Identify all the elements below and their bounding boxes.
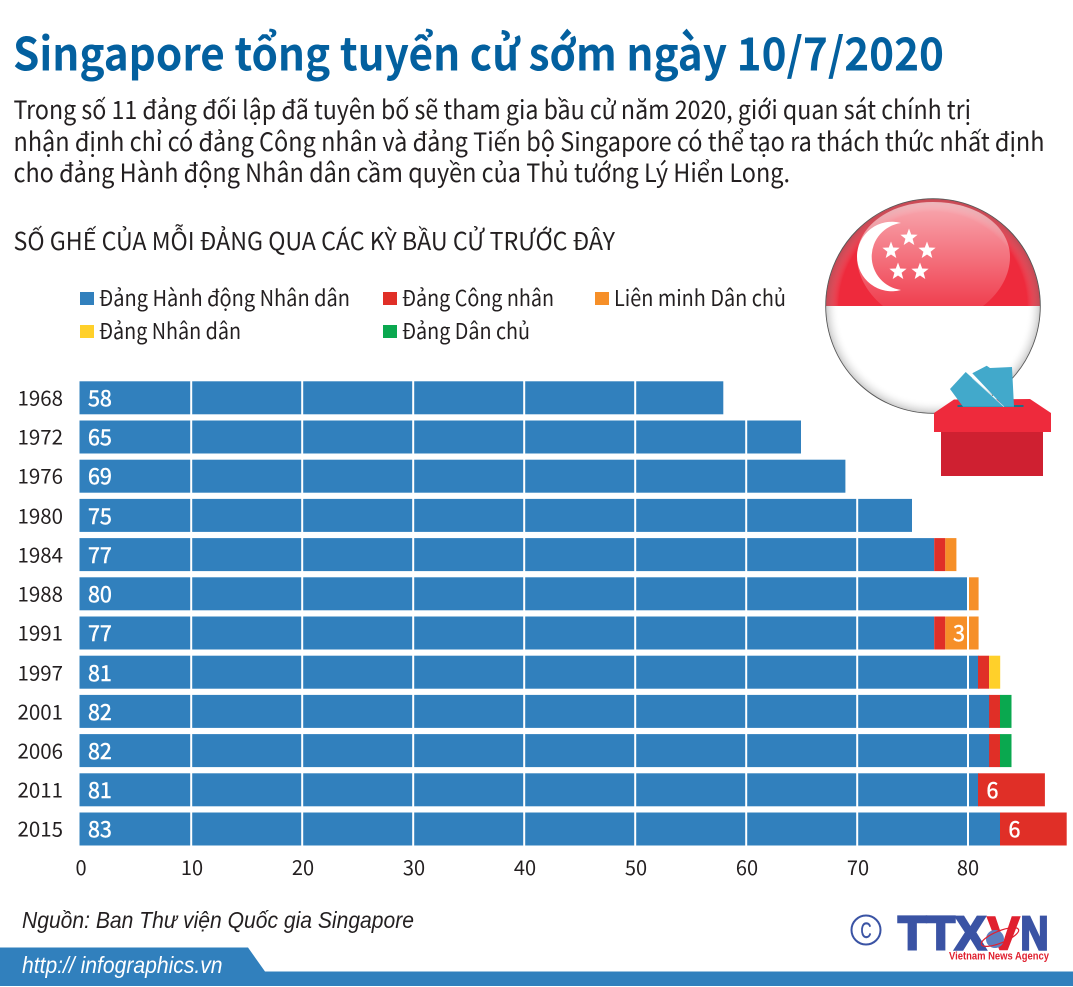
bar value labels: 77: [88, 617, 112, 648]
x axis labels: 40: [514, 852, 536, 881]
bar value labels: 81: [88, 657, 112, 688]
copyright icon: [852, 916, 880, 944]
legend item: Đảng Dân chủ: Đảng Dân chủ: [402, 314, 530, 346]
logo: TTXVN: TTX: [898, 908, 986, 960]
chart heading: SỐ GHẾ CỦA MỖI ĐẢNG QUA CÁC KỲ BẦU CỬ TRƯỚC ĐÂY: [14, 223, 616, 258]
row 1980: 1980: [17, 500, 63, 530]
row 1984: [17, 538, 956, 571]
icon: ballot box: [934, 366, 1051, 476]
bar value labels: 58: [88, 382, 112, 413]
row 1976: [17, 460, 845, 493]
footer band: [0, 948, 1073, 986]
row 2011: [17, 773, 1045, 806]
intro paragraph: Trong số 11 đảng đối lập đã tuyên bố sẽ tham gia bầu cử năm 2020, giới quan sát chính trị: [14, 90, 971, 127]
row 1991: [17, 616, 979, 650]
bar value labels: 6: [1008, 813, 1020, 844]
bar chart: [17, 381, 1067, 881]
bar value labels: 81: [88, 774, 112, 805]
row 1968: 1968: [17, 382, 63, 412]
row 1972: 1972: [17, 420, 63, 450]
copyright icon: C: [860, 918, 872, 943]
row 2015: [17, 812, 1067, 846]
logo: TTXVN: [852, 908, 1050, 962]
x axis labels: [75, 852, 979, 881]
row 1984: 1984: [17, 538, 63, 568]
row 1988: 1988: [17, 578, 63, 608]
row 1991: 1991: [17, 616, 63, 646]
bar value labels: 83: [88, 813, 112, 844]
row 2001: [17, 695, 1012, 728]
x axis labels: 0: [75, 852, 87, 881]
row 2015: 2015: [17, 812, 63, 842]
legend item: Liên minh Dân chủ: Liên minh Dân chủ: [614, 281, 786, 313]
x axis labels: 30: [403, 852, 425, 881]
row 1997: 1997: [17, 656, 63, 686]
x axis labels: 50: [625, 852, 647, 881]
row 1997: [17, 656, 1000, 689]
legend item: Đảng Công nhân: Đảng Công nhân: [402, 281, 554, 313]
x axis labels: 60: [736, 852, 758, 881]
intro paragraph: [14, 90, 1044, 190]
x axis labels: 20: [292, 852, 314, 881]
bar value labels: [88, 382, 1020, 844]
bar value labels: 77: [88, 539, 112, 570]
legend item: Đảng Nhân dân: Đảng Nhân dân: [99, 314, 241, 346]
row 1976: 1976: [17, 460, 63, 490]
source note: Nguồn: Ban Thư viện Quốc gia Singapore: [22, 907, 414, 933]
intro paragraph: cho đảng Hành động Nhân dân cầm quyền của Thủ tướng Lý Hiển Long.: [14, 153, 790, 190]
logo: TTXVN: Vietnam News Agency: [949, 950, 1050, 962]
logo: TTXVN: N: [1020, 908, 1048, 960]
x axis labels: 80: [957, 852, 979, 881]
row 2006: 2006: [17, 734, 63, 764]
bar value labels: 75: [88, 500, 112, 531]
row 2001: 2001: [17, 696, 63, 726]
bar value labels: 3: [953, 617, 965, 648]
row 1968: [17, 381, 723, 414]
bar value labels: 6: [986, 774, 998, 805]
bar value labels: 69: [88, 460, 112, 491]
row 2011: 2011: [17, 774, 63, 804]
title: Singapore tổng tuyển cử sớm ngày 10/7/2020: [13, 18, 944, 84]
legend item: Đảng Hành động Nhân dân: Đảng Hành động Nhân dân: [99, 281, 350, 313]
legend: [80, 281, 786, 346]
row 1972: [17, 420, 801, 454]
bar value labels: 82: [88, 696, 112, 727]
bar value labels: 82: [88, 735, 112, 766]
row 1988: [17, 577, 979, 610]
footer url: http:// infographics.vn: [22, 952, 222, 978]
x axis labels: 10: [181, 852, 203, 881]
bar value labels: 80: [88, 578, 112, 609]
row 1980: [17, 499, 912, 532]
logo: TTXVN: V: [987, 908, 1020, 960]
bar value labels: 65: [88, 421, 112, 452]
row 2006: [17, 734, 1012, 767]
icon: Singapore flag sphere: [825, 198, 1041, 414]
x axis labels: 70: [847, 852, 869, 881]
